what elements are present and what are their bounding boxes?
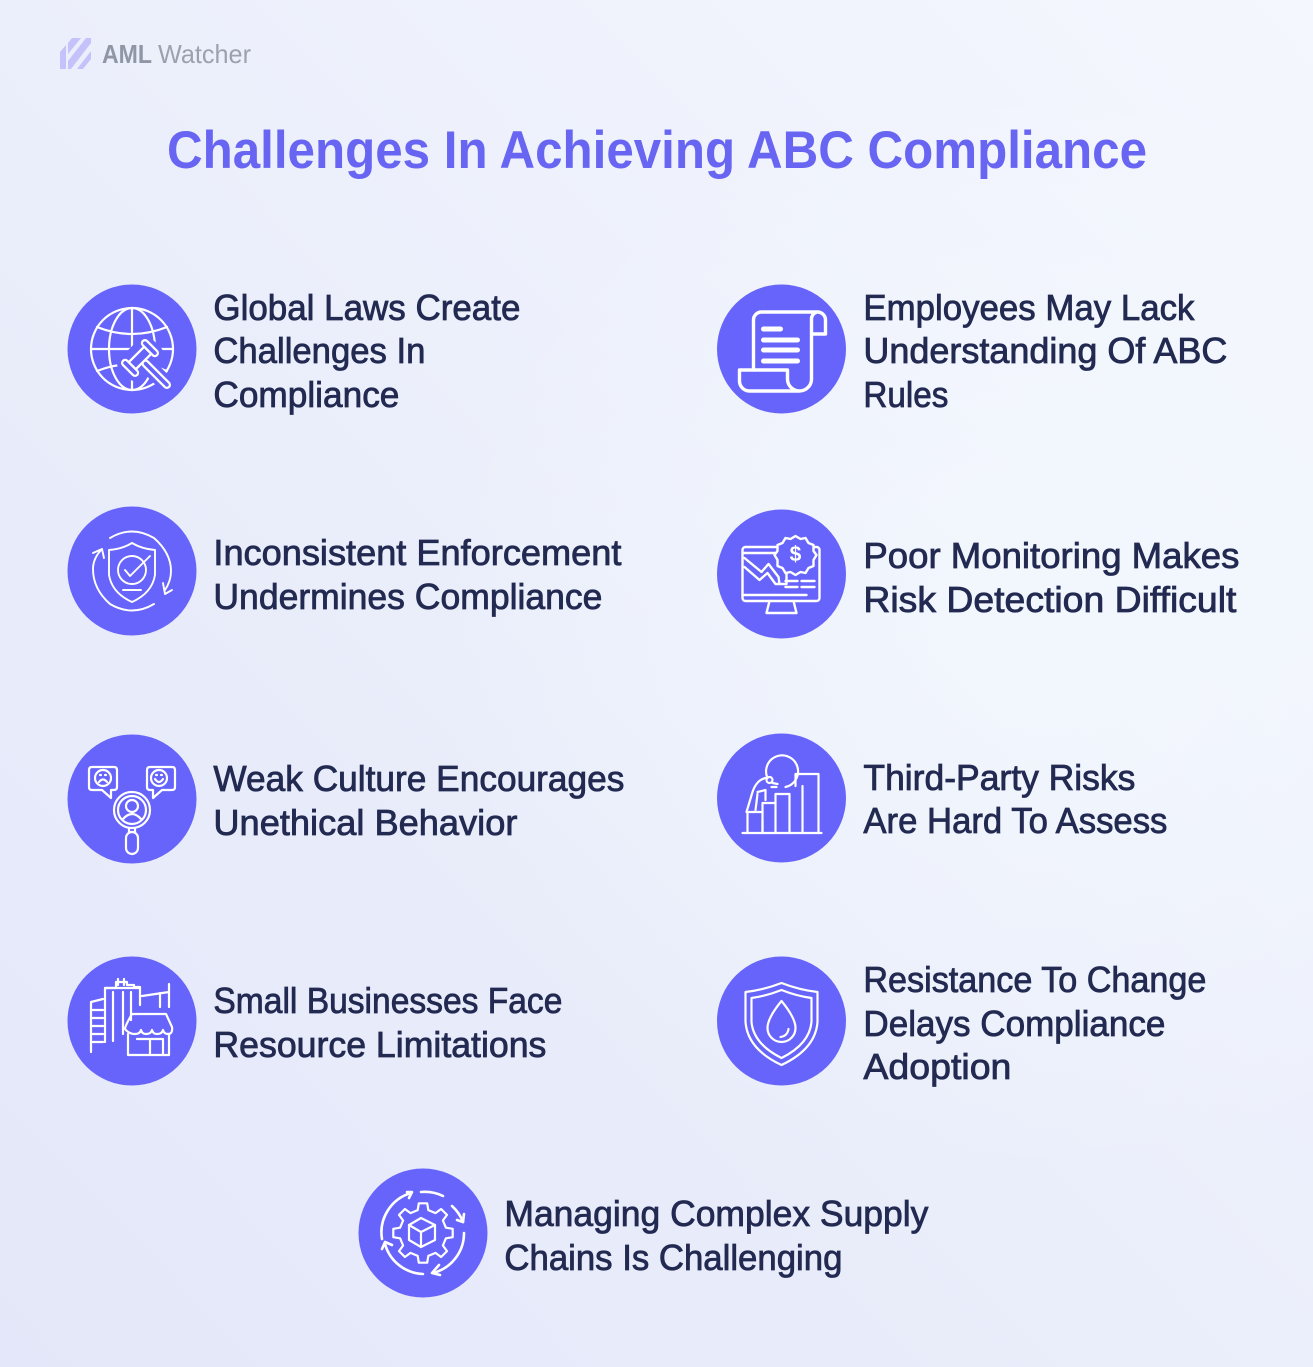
text: employees: Rules	[863, 374, 948, 415]
text: resistance to change: Adoption	[863, 1046, 1011, 1087]
text: weak culture	[213, 758, 624, 843]
item: small businesses	[68, 956, 562, 1086]
text: employees: Employees May Lack	[863, 287, 1195, 328]
text: global laws: Compliance	[213, 374, 399, 415]
text: weak culture: Unethical Behavior	[213, 802, 517, 843]
text: inconsistent enforcement	[213, 532, 621, 617]
text: third-party risks	[863, 757, 1167, 841]
icon: person pushing ball up bars	[717, 734, 846, 862]
title: Challenges In Achieving ABC Compliance	[167, 121, 1147, 180]
item: employees	[717, 284, 1227, 415]
text: weak culture: Weak Culture Encourages	[213, 758, 624, 799]
item: inconsistent enforcement	[68, 506, 621, 636]
dollar sign: $	[790, 543, 802, 566]
icon: globe and gavel	[68, 284, 196, 414]
icon: buildings and shop	[68, 956, 196, 1086]
text: poor monitoring	[863, 535, 1239, 620]
logo: AML Watcher	[60, 38, 251, 69]
text: small businesses	[213, 980, 562, 1065]
item: supply chains	[358, 1168, 928, 1298]
icon: shield with cycle arrows	[68, 506, 196, 636]
icon: gear with cube and cycle arrows	[358, 1168, 488, 1298]
text: employees	[863, 287, 1227, 415]
logo wordmark Watcher: Watcher	[158, 39, 251, 69]
icon: monitor with falling chart	[717, 510, 846, 638]
text: global laws: Global Laws Create	[213, 287, 520, 328]
text: third-party risks: Are Hard To Assess	[863, 800, 1167, 841]
text: supply chains	[504, 1193, 928, 1278]
icon: shield with drop	[717, 956, 846, 1086]
text: small businesses: Resource Limitations	[213, 1024, 546, 1065]
text: resistance to change: Delays Compliance	[863, 1003, 1165, 1044]
icon: scroll	[717, 284, 846, 414]
item: poor monitoring	[717, 510, 1239, 638]
text: small businesses: Small Businesses Face	[213, 980, 562, 1021]
item: third-party risks	[717, 734, 1167, 862]
text: inconsistent enforcement: Inconsistent Enforcement	[213, 532, 621, 573]
text: global laws	[213, 287, 520, 415]
text: supply chains: Chains Is Challenging	[504, 1237, 842, 1278]
icon: feedback magnifier	[68, 734, 196, 864]
text: resistance to change: Resistance To Change	[863, 959, 1206, 1000]
item: resistance to change	[717, 956, 1206, 1087]
text: global laws: Challenges In	[213, 330, 425, 371]
text: third-party risks: Third-Party Risks	[863, 757, 1135, 798]
text: poor monitoring: Risk Detection Difficult	[863, 579, 1236, 620]
text: resistance to change	[863, 959, 1206, 1087]
item: global laws	[68, 284, 520, 415]
item: weak culture	[68, 734, 624, 864]
text: poor monitoring: Poor Monitoring Makes	[863, 535, 1239, 576]
icon: logo stripes	[60, 38, 91, 69]
logo wordmark AML: AML	[102, 39, 152, 69]
text: employees: Understanding Of ABC	[863, 330, 1227, 371]
text: inconsistent enforcement: Undermines Compliance	[213, 576, 602, 617]
text: supply chains: Managing Complex Supply	[504, 1193, 928, 1234]
